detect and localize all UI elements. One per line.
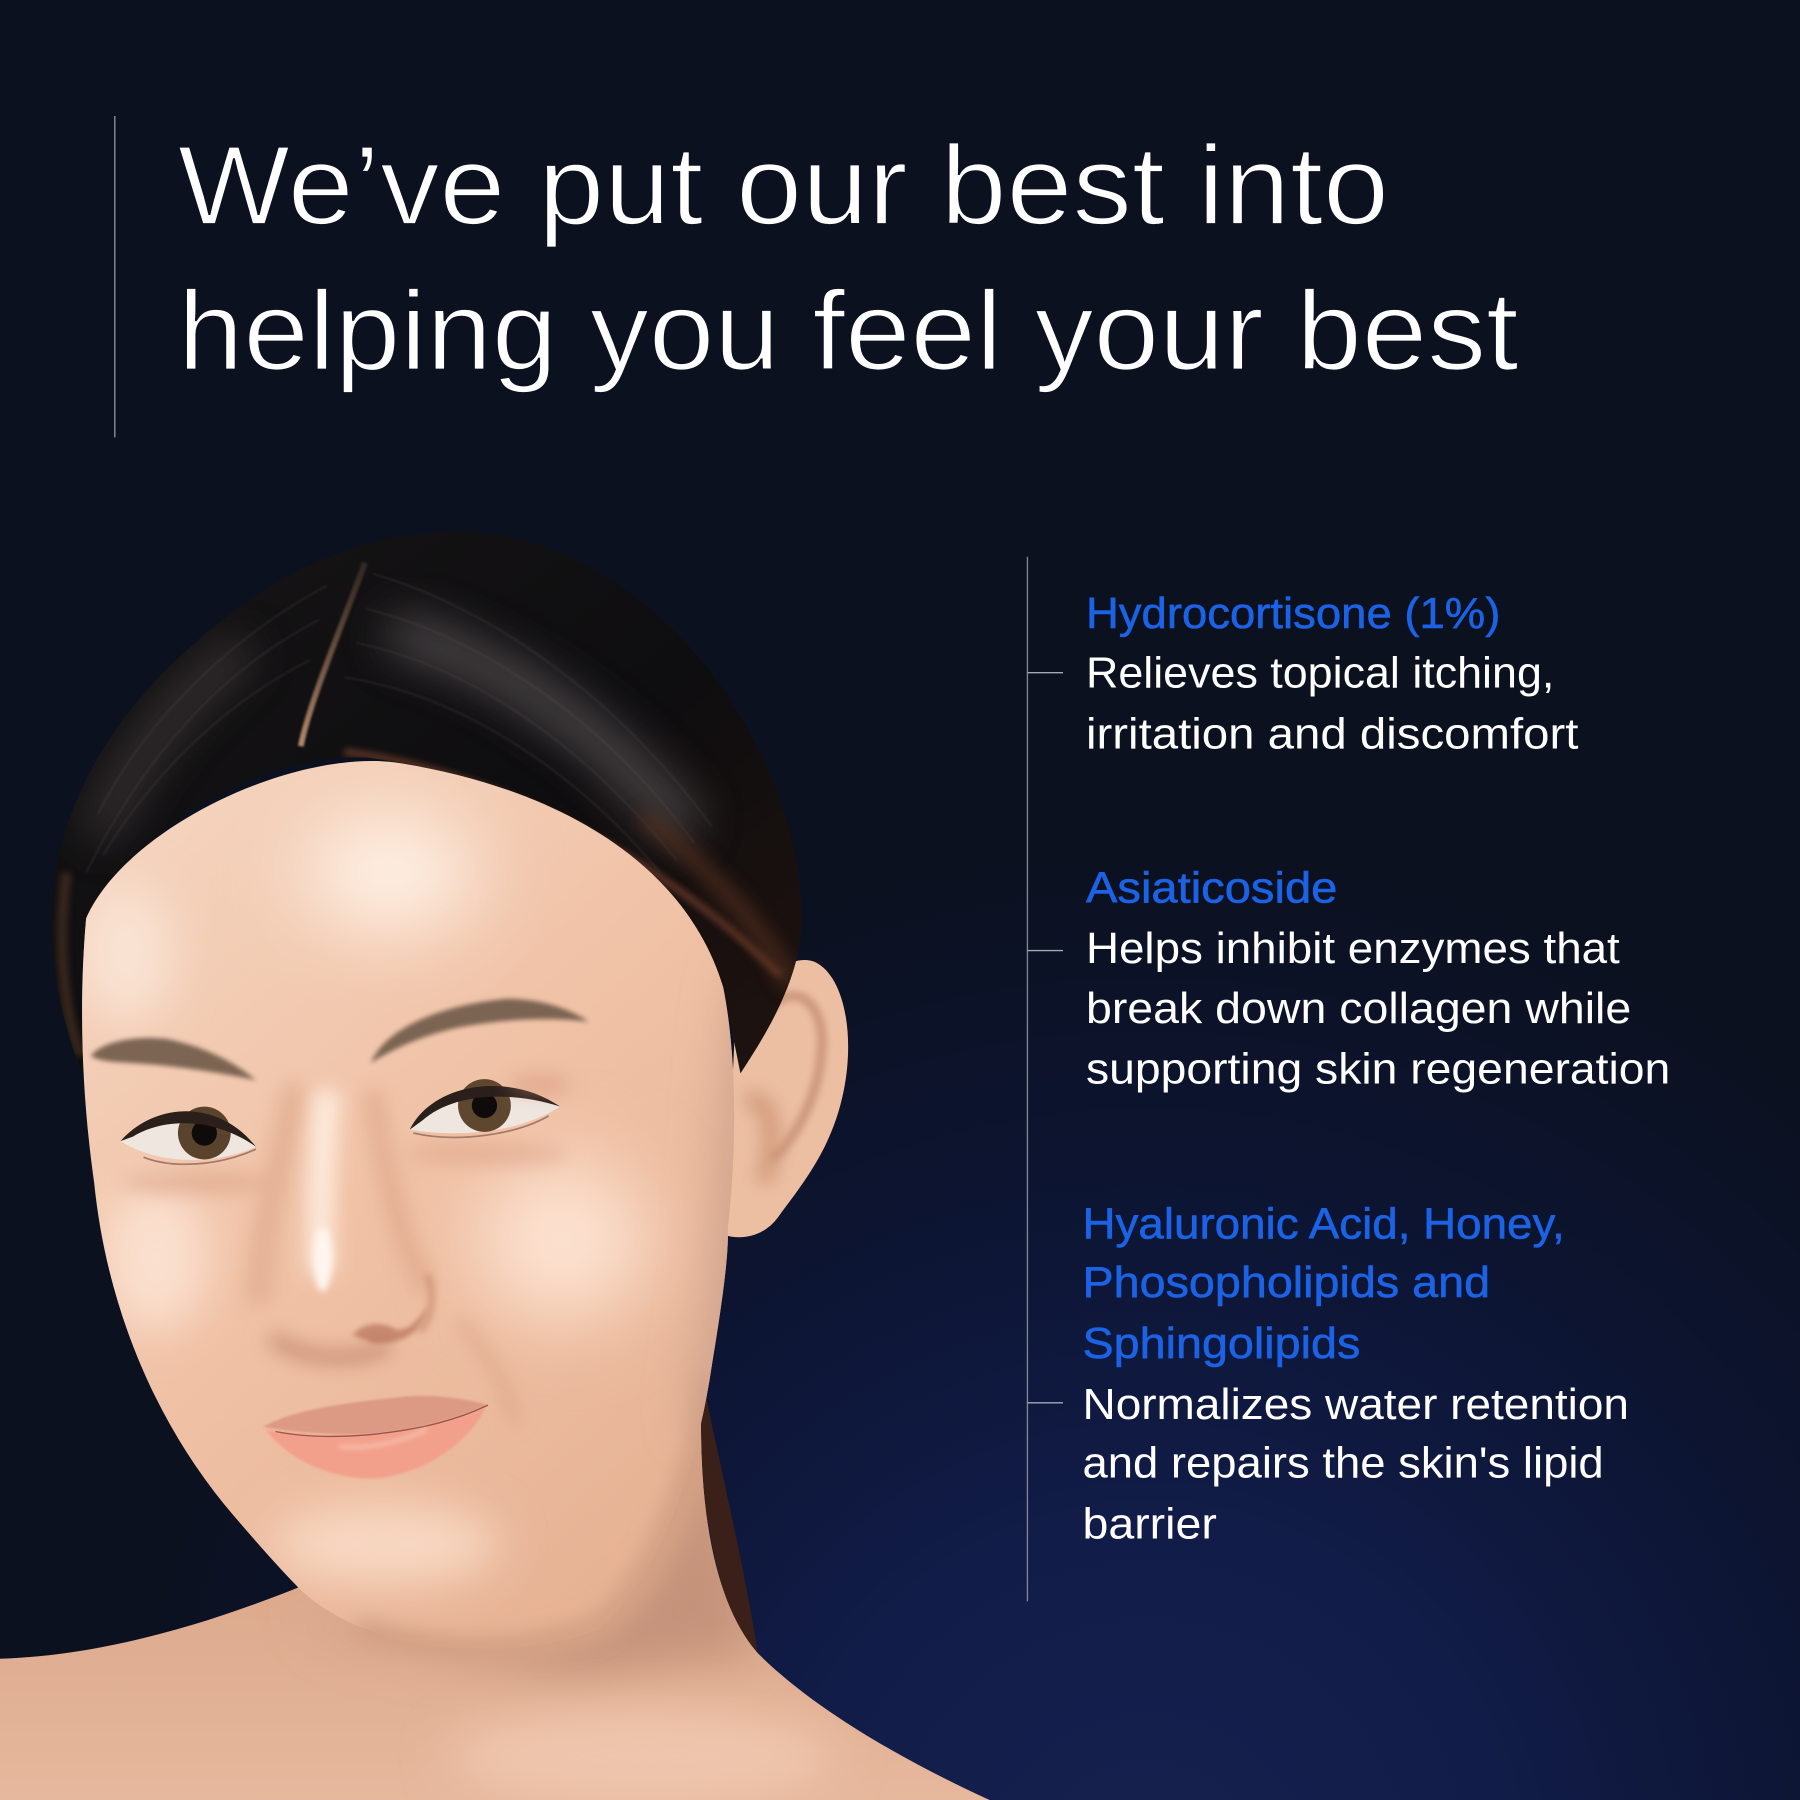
- ponytail: [696, 1378, 758, 1653]
- ingredient: hyaluronic acid group: Hyaluronic Acid, Honey,: [1083, 1201, 1565, 1249]
- neck and shoulders: [0, 1424, 990, 1800]
- lips: [263, 1396, 488, 1479]
- hair strands: [86, 574, 712, 872]
- right eye: [410, 1076, 572, 1137]
- reddish hair tones: [344, 752, 781, 976]
- left eye: [121, 1107, 256, 1164]
- ear: [726, 960, 848, 1237]
- jaw blend: [356, 1378, 712, 1649]
- title block: helping you feel your best: [178, 268, 1519, 394]
- hair: [51, 532, 801, 1091]
- title block: We’ve put our best into: [178, 122, 1389, 248]
- under-eye tone: [121, 1171, 270, 1194]
- ingredient: hydrocortisone: [1086, 590, 1578, 758]
- ingredient: asiaticoside: Helps inhibit enzymes that: [1086, 925, 1620, 973]
- left eyebrow: [91, 1038, 256, 1080]
- portrait of woman: [0, 532, 1033, 1800]
- ingredient: hyaluronic acid group: Normalizes water retention: [1083, 1381, 1629, 1429]
- ingredient: hyaluronic acid group: barrier: [1083, 1500, 1217, 1548]
- face: [82, 761, 734, 1649]
- ingredient: hydrocortisone: irritation and discomfort: [1086, 710, 1578, 758]
- ingredient list divider: [1027, 557, 1063, 1601]
- ingredient: hyaluronic acid group: Sphingolipids: [1083, 1320, 1360, 1368]
- ingredient: asiaticoside: Asiaticoside: [1086, 864, 1337, 912]
- nose shading: [259, 1085, 296, 1303]
- smile crease: [459, 1320, 514, 1423]
- ingredient: asiaticoside: break down collagen while: [1086, 985, 1631, 1033]
- title block: [115, 116, 1519, 437]
- ingredient: hyaluronic acid group: and repairs the skin's lipid: [1083, 1439, 1604, 1487]
- ingredient: hydrocortisone: Hydrocortisone (1%): [1086, 590, 1500, 638]
- hair sheen: [390, 631, 689, 832]
- right eyebrow: [371, 999, 589, 1063]
- ingredient: hydrocortisone: Relieves topical itching,: [1086, 650, 1554, 698]
- nostril: [352, 1306, 427, 1343]
- hair part: [301, 562, 365, 746]
- face shading and highlights: [80, 815, 781, 1584]
- ingredient: asiaticoside: supporting skin regeneration: [1086, 1046, 1670, 1094]
- ingredient: hyaluronic acid group: Phosopholipids and: [1083, 1259, 1490, 1307]
- ingredient: hyaluronic acid group: [1083, 1201, 1629, 1548]
- ingredient: asiaticoside: [1086, 864, 1670, 1094]
